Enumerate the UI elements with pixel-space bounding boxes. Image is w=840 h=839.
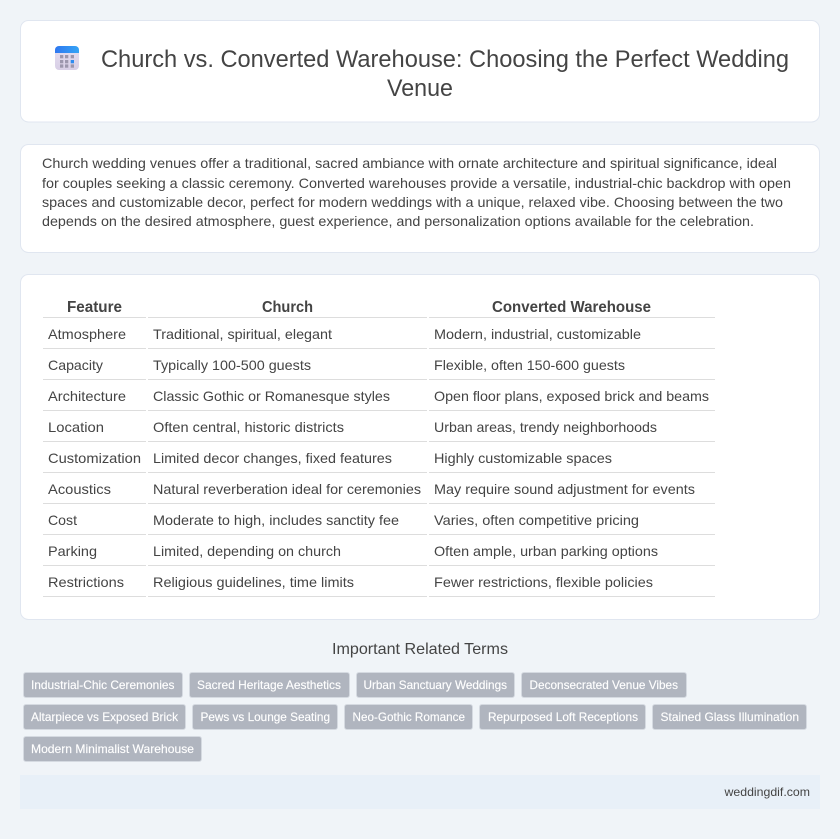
row: Capacity: Flexible, often 150-600 guests xyxy=(434,357,625,373)
row: Cost xyxy=(48,512,639,528)
row: Parking: Parking xyxy=(48,543,97,559)
row: Customization: Limited decor changes, fixed features xyxy=(153,450,392,466)
tag: Sacred Heritage Aesthetics xyxy=(197,678,341,692)
row: Location: Urban areas, trendy neighborhoods xyxy=(434,419,657,435)
table header: Feature xyxy=(67,299,122,316)
tag xyxy=(24,672,182,698)
row: Atmosphere xyxy=(48,326,641,342)
row: Location: Often central, historic districts xyxy=(153,419,344,435)
text block: description: for couples seeking a classic ceremony. Converted warehouses provide a versatile, industrial-chic backdrop with open xyxy=(42,175,791,191)
tag xyxy=(24,736,202,762)
row: Cost: Cost xyxy=(48,512,77,528)
row: Architecture: Classic Gothic or Romanesque styles xyxy=(153,388,390,404)
row: Acoustics: Natural reverberation ideal for ceremonies xyxy=(153,481,421,497)
tag xyxy=(192,704,338,730)
row: Atmosphere: Atmosphere xyxy=(48,326,126,342)
row: Acoustics: Acoustics xyxy=(48,481,111,497)
tag xyxy=(24,704,186,730)
icon: calendar xyxy=(55,46,79,70)
text block: description: spaces and customizable decor, perfect for modern weddings with a unique, relaxed vibe. Choosing between the two xyxy=(42,194,783,210)
tag xyxy=(356,672,514,698)
tag xyxy=(190,672,350,698)
tag xyxy=(344,704,472,730)
row: Customization: Customization xyxy=(48,450,141,466)
row: Restrictions: Restrictions xyxy=(48,574,124,590)
row: Location xyxy=(48,419,657,435)
row: Parking: Often ample, urban parking options xyxy=(434,543,658,559)
tag xyxy=(522,672,686,698)
tag: Altarpiece vs Exposed Brick xyxy=(31,710,179,724)
row: Restrictions: Religious guidelines, time limits xyxy=(153,574,354,590)
table header: Church xyxy=(262,299,313,316)
panel: comparison table xyxy=(20,274,820,620)
row: Architecture: Open floor plans, exposed brick and beams xyxy=(434,388,709,404)
row: Capacity: Typically 100-500 guests xyxy=(153,357,311,373)
text block: description: depends on the desired atmosphere, guest experience, and personalization options available for the celebration. xyxy=(42,213,754,229)
row: Architecture xyxy=(48,388,709,404)
tag: Modern Minimalist Warehouse xyxy=(31,742,194,756)
row: Cost: Varies, often competitive pricing xyxy=(434,512,639,528)
row: Restrictions: Fewer restrictions, flexible policies xyxy=(434,574,653,590)
row: Acoustics: May require sound adjustment for events xyxy=(434,481,695,497)
tag: Repurposed Loft Receptions xyxy=(488,710,638,724)
tag: Neo-Gothic Romance xyxy=(352,710,465,724)
row: Parking: Limited, depending on church xyxy=(153,543,341,559)
tag xyxy=(480,704,646,730)
text block: description xyxy=(42,155,791,229)
row: Architecture: Architecture xyxy=(48,388,126,404)
tag: Stained Glass Illumination xyxy=(660,710,799,724)
row: Capacity xyxy=(48,357,625,373)
related terms tags xyxy=(24,672,806,762)
table header: Converted Warehouse xyxy=(492,299,651,316)
row: Atmosphere: Traditional, spiritual, elegant xyxy=(153,326,332,342)
row: Customization xyxy=(48,450,612,466)
heading: Important Related Terms: Important Related Terms xyxy=(332,641,508,658)
table header xyxy=(67,299,651,316)
row: Cost: Moderate to high, includes sanctity fee xyxy=(153,512,399,528)
title: Venue xyxy=(387,75,453,102)
title: Church vs. Converted Warehouse: Choosing the Perfect Wedding xyxy=(101,46,789,73)
row: Customization: Highly customizable spaces xyxy=(434,450,612,466)
row: Parking xyxy=(48,543,658,559)
title xyxy=(101,46,789,102)
row: Restrictions xyxy=(48,574,653,590)
tag: Industrial-Chic Ceremonies xyxy=(31,678,174,692)
tag: Pews vs Lounge Seating xyxy=(200,710,330,724)
panel: description xyxy=(20,144,820,252)
row: Location: Location xyxy=(48,419,104,435)
tag xyxy=(652,704,806,730)
tag: Deconsecrated Venue Vibes xyxy=(530,678,678,692)
tag: Urban Sanctuary Weddings xyxy=(364,678,507,692)
panel: header xyxy=(20,20,820,122)
text block: description: Church wedding venues offer a traditional, sacred ambiance with ornate architecture and spiritual significance, ideal xyxy=(42,155,777,171)
row: Capacity: Capacity xyxy=(48,357,103,373)
footer xyxy=(20,775,820,809)
row: Atmosphere: Modern, industrial, customizable xyxy=(434,326,641,342)
row: Acoustics xyxy=(48,481,695,497)
footer: weddingdif.com xyxy=(723,785,810,799)
